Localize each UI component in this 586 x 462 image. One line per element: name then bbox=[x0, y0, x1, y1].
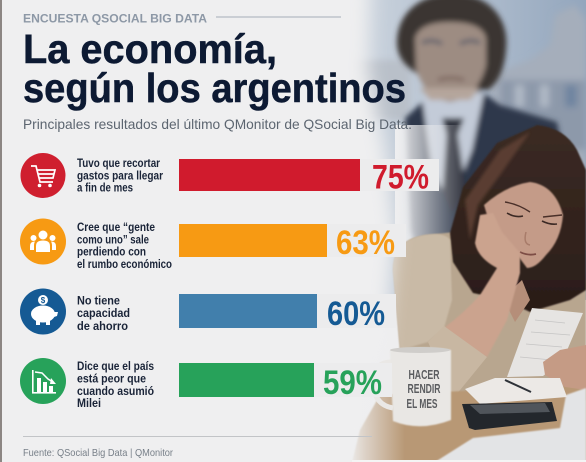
bar bbox=[179, 224, 327, 257]
title: según los argentinos bbox=[23, 65, 406, 111]
eyebrows bbox=[505, 202, 562, 217]
subtitle: Principales resultados del último QMonitor de QSocial Big Data. bbox=[23, 116, 412, 132]
label: como uno” sale bbox=[77, 234, 149, 246]
bar bbox=[179, 294, 317, 328]
row: 59% bbox=[20, 358, 392, 410]
icon: piggy bank bbox=[20, 288, 66, 334]
bar bbox=[179, 363, 314, 397]
calculator keys bbox=[470, 403, 550, 414]
sleeve cuff bbox=[428, 326, 487, 395]
icon: falling bar chart bbox=[20, 358, 66, 404]
arm and hand bbox=[444, 213, 520, 357]
percent background bbox=[360, 159, 439, 191]
label: gastos para llegar bbox=[77, 170, 163, 182]
table bbox=[352, 385, 586, 462]
row: 60% bbox=[20, 288, 396, 334]
title: La economía, bbox=[23, 26, 277, 72]
receipt lines bbox=[520, 320, 570, 360]
label: de ahorro bbox=[77, 321, 128, 333]
label: capacidad bbox=[77, 308, 130, 320]
notebook bbox=[465, 378, 567, 404]
value: 59% bbox=[323, 364, 382, 402]
label bbox=[77, 296, 130, 333]
hair highlight bbox=[465, 132, 530, 240]
percent background bbox=[317, 294, 396, 328]
sweater bbox=[393, 232, 586, 402]
kicker: encuesta: ENCUESTA QSOCIAL BIG DATA bbox=[23, 12, 207, 26]
man: blurred figure in suit bbox=[397, 0, 570, 260]
mug text: HACER bbox=[408, 368, 440, 382]
icon: piggy bank: $ bbox=[41, 296, 46, 305]
face bbox=[484, 182, 563, 268]
value: 63% bbox=[336, 224, 395, 262]
papers bbox=[435, 388, 586, 462]
percent background bbox=[314, 363, 392, 397]
label: está peor que bbox=[77, 374, 146, 386]
eye lids bbox=[507, 213, 557, 224]
icon: group of people bbox=[20, 218, 66, 264]
label: Milei bbox=[77, 398, 101, 410]
value: 75% bbox=[372, 158, 429, 196]
label: Dice que el país bbox=[77, 361, 154, 373]
row: 63% bbox=[20, 218, 406, 271]
bar bbox=[179, 159, 360, 191]
hair bbox=[450, 125, 586, 312]
mug text: RENDIR bbox=[408, 382, 440, 396]
calculator bbox=[462, 402, 557, 430]
bottom edge strip bbox=[352, 460, 586, 462]
label: Tuvo que recortar bbox=[77, 158, 160, 170]
notebook spine bbox=[505, 380, 531, 392]
title bbox=[23, 26, 406, 111]
label bbox=[77, 361, 154, 410]
row: 75% bbox=[20, 153, 439, 198]
nose and lips bbox=[525, 232, 530, 245]
label: a fin de mes bbox=[77, 182, 133, 194]
footer: source: Fuente: QSocial Big Data | QMonitor bbox=[23, 447, 173, 459]
haze over lower man bbox=[395, 125, 465, 250]
mug: hacer rendir el mes bbox=[373, 347, 451, 426]
haze over table edge bbox=[345, 395, 405, 462]
label: cuando asumió bbox=[77, 386, 154, 398]
mug text bbox=[406, 368, 440, 411]
label: No tiene bbox=[77, 296, 120, 308]
label: el rumbo económico bbox=[77, 259, 172, 271]
label: perdiendo con bbox=[77, 246, 146, 258]
label: Cree que “gente bbox=[77, 222, 155, 234]
label bbox=[77, 222, 172, 271]
mug text: EL MES bbox=[406, 397, 438, 411]
percent background bbox=[327, 224, 406, 257]
background: blurred sky and building bbox=[330, 0, 586, 300]
hand holding receipt bbox=[543, 345, 586, 390]
label bbox=[77, 158, 163, 194]
chest bbox=[503, 280, 530, 322]
receipt bbox=[507, 308, 583, 377]
photo: background with man and woman bbox=[330, 0, 586, 462]
icon: shopping cart bbox=[20, 153, 66, 198]
woman: worried, holding a receipt bbox=[352, 125, 586, 462]
sleeve bbox=[393, 234, 452, 350]
panel: light overlay bbox=[0, 0, 395, 462]
value: 60% bbox=[327, 295, 385, 333]
